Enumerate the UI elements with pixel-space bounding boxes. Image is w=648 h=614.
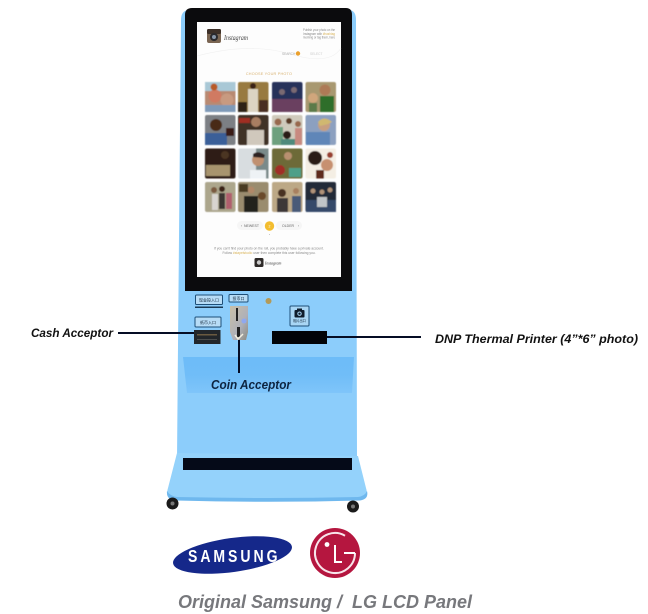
row 3: [205, 148, 236, 178]
pagination: •: [269, 232, 270, 236]
pagination: ›: [298, 224, 300, 228]
printer slot: [272, 331, 327, 344]
pagination: OLDER: [282, 224, 295, 228]
photo grid: [205, 82, 336, 212]
screen: [197, 22, 341, 277]
screen bezel: [185, 8, 352, 291]
base slot: [183, 458, 352, 470]
screen instructions: Instagram with #hashtag: [303, 32, 335, 36]
footer instagram logo: Instagram: [264, 260, 282, 266]
screen footer note: Follow #stapelstudio user then complete this user following you.: [222, 251, 316, 255]
caption: Original Samsung / LG LCD Panel: [178, 591, 473, 612]
callout: cash acceptor: Cash Acceptor: [31, 326, 114, 340]
callout: DNP thermal printer: DNP Thermal Printer (4”*6” photo): [435, 332, 638, 346]
screen instructions: [303, 28, 335, 40]
kiosk: [166, 8, 367, 512]
coin acceptor: [230, 306, 248, 340]
icon: instagram camera: [207, 29, 221, 43]
row 2: [205, 115, 236, 145]
screen instructions: Publish your photo on the: [303, 28, 335, 32]
LG logo: [310, 528, 360, 578]
screen instructions: morning or tag them, here: [303, 36, 335, 40]
status indicator: [266, 298, 272, 304]
row 1: [205, 82, 236, 112]
cash acceptor label plate: 纸币入口: [200, 319, 216, 325]
step indicator: SEARCH: [282, 52, 296, 56]
screen footer note: If you can't find your photo on the roll, you probably have a private account.: [214, 246, 324, 250]
step indicator: SELECT: [310, 52, 322, 56]
callout: coin acceptor: [211, 340, 292, 392]
printer icon plate: 相片出口: [293, 318, 306, 323]
pagination: 2: [269, 224, 271, 228]
cash acceptor slot: [194, 330, 220, 344]
cash label plate: 现金投入口: [199, 297, 219, 303]
kiosk body: [177, 10, 357, 460]
caster wheels: [166, 498, 359, 512]
footer instagram logo: [254, 258, 282, 267]
kiosk base: [167, 453, 367, 500]
screen footer note: [214, 246, 324, 255]
samsung logo: [171, 530, 294, 580]
step indicator: [282, 51, 322, 56]
choose your photo heading: CHOOSE YOUR PHOTO: [246, 72, 292, 76]
coin label plate: 投币口: [232, 295, 244, 301]
pagination: [237, 221, 302, 236]
pagination: NEWEST: [244, 224, 260, 228]
pagination: ‹: [241, 224, 243, 228]
lower body recessed band: [183, 357, 354, 393]
screen header: [197, 28, 341, 76]
samsung logo: SAMSUNG: [188, 546, 280, 566]
control panel: [194, 294, 327, 344]
instagram wordmark: Instagram: [223, 33, 248, 42]
callout: coin acceptor: Coin Acceptor: [211, 378, 292, 392]
row 4: [205, 182, 236, 212]
